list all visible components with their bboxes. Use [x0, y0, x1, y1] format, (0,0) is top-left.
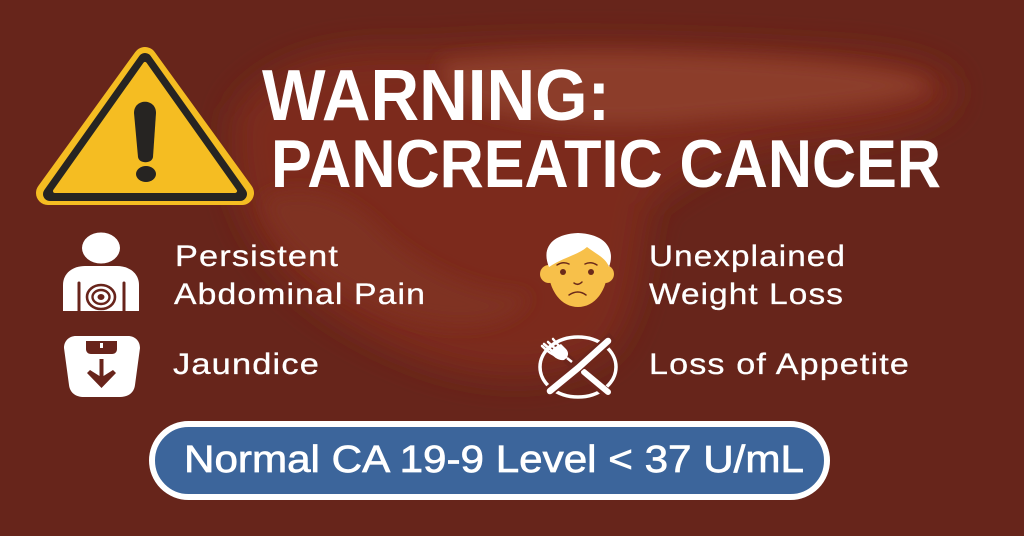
icon: weighing scale: [64, 336, 140, 397]
icon: warning triangle: [48, 59, 242, 194]
text: unexplained weight loss: Weight Loss: [649, 278, 844, 311]
icon: crossed fork and knife on plate: [540, 337, 616, 397]
icon: worried face: [540, 233, 614, 307]
text: jaundice: Jaundice: [173, 348, 320, 381]
text: unexplained weight loss: [649, 240, 846, 311]
exclamation mark: [134, 102, 156, 182]
title: PANCREATIC CANCER: [271, 126, 941, 202]
blurred pancreas illustration: [231, 44, 955, 376]
callout: normal CA 19-9 level: Normal CA 19-9 Level < 37 U/mL: [184, 439, 804, 481]
icon: person with abdominal pain target: [63, 232, 139, 311]
text: persistent abdominal pain: [174, 240, 426, 311]
title: [262, 56, 941, 202]
callout: normal CA 19-9 level: [152, 424, 827, 497]
text: persistent abdominal pain: Persistent: [175, 240, 339, 273]
title: WARNING:: [262, 56, 610, 136]
text: loss of appetite: Loss of Appetite: [649, 348, 910, 381]
text: unexplained weight loss: Unexplained: [649, 240, 846, 273]
text: persistent abdominal pain: Abdominal Pain: [174, 278, 426, 311]
